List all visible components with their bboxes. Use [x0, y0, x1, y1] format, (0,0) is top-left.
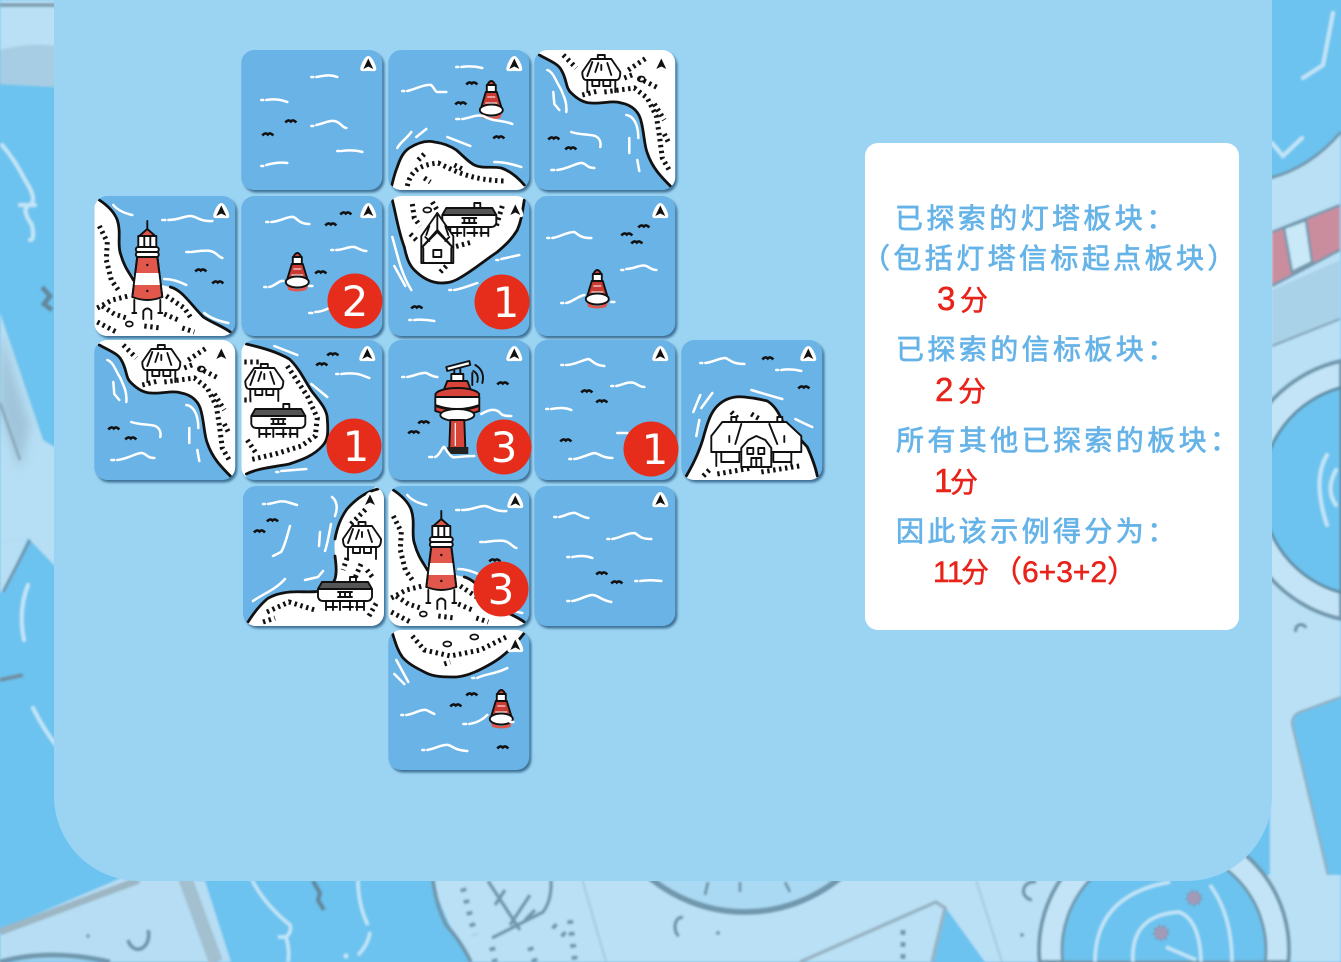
- panel: scoring explanation card: [862, 143, 1241, 630]
- bottom strip pale tiles and rings: [0, 614, 1341, 962]
- text: 1 point: 分: [950, 467, 978, 498]
- text: beacon tile heading: 已探索的信标板块：: [896, 334, 1179, 365]
- score badge: 1: [474, 274, 530, 330]
- text: total score: 1: [933, 556, 950, 589]
- score badge: 1: [326, 418, 382, 474]
- tile: open sea, fourth row right: [534, 486, 677, 628]
- tile: large house on dome island: [681, 340, 824, 482]
- tile: buoy and shore, top row middle: [388, 50, 531, 192]
- tile: open sea, top row left: [241, 50, 384, 192]
- tile: buoy in sea, second row right: [534, 196, 677, 338]
- right strip pale tiles and ring: [1237, 0, 1341, 962]
- score badge: 1: 1: [642, 425, 668, 474]
- text: total heading: 因此该示例得分为：: [896, 516, 1179, 547]
- text: 3 points: 分: [960, 285, 988, 316]
- text: total score: 1: [947, 556, 964, 589]
- text: 2 points: 分: [958, 376, 986, 407]
- text: lighthouse tile note: （包括灯塔信标起点板块）: [862, 243, 1239, 274]
- tile: cottage on coast, third row left: [94, 338, 237, 482]
- score badge: 3: [476, 420, 532, 474]
- tile: lighthouse, fourth row middle: [388, 486, 531, 628]
- tile: church and longhouse peninsula: [388, 194, 531, 338]
- tile: cottage on coast, top row right: [534, 48, 677, 192]
- score badge: 1: 1: [343, 422, 369, 471]
- text: lighthouse tile heading: 已探索的灯塔板块：: [895, 203, 1178, 234]
- score badge: 2: [328, 274, 382, 328]
- tile: lighthouse, second row left: [94, 196, 237, 338]
- score badge: 1: [624, 422, 678, 476]
- text: 2 points: 2: [935, 371, 953, 408]
- tile: two houses on peninsula: [241, 338, 384, 482]
- text: total score: （6+3+2）: [992, 556, 1137, 589]
- tile: buoy in sea, second row: [241, 196, 384, 338]
- tile: buoy below shore, bottom row: [388, 628, 531, 772]
- score badge: 1: 1: [493, 278, 519, 327]
- tile: open sea, third row: [534, 340, 677, 482]
- tile: coast with two houses, fourth row left: [243, 486, 386, 628]
- score badge: 3: [474, 562, 528, 616]
- left strip pale tiles: [0, 0, 56, 745]
- score badge: 3: 3: [491, 423, 517, 472]
- text: other tiles heading: 所有其他已探索的板块：: [896, 425, 1241, 456]
- text: total score: 分: [961, 557, 989, 588]
- icon: large thatched house: [711, 417, 801, 467]
- text: 3 points: 3: [937, 280, 955, 317]
- score badge: 3: 3: [488, 565, 514, 614]
- tile: radar tower: [388, 340, 531, 482]
- score badge: 2: 2: [342, 277, 368, 326]
- text: 1 point: 1: [934, 462, 952, 499]
